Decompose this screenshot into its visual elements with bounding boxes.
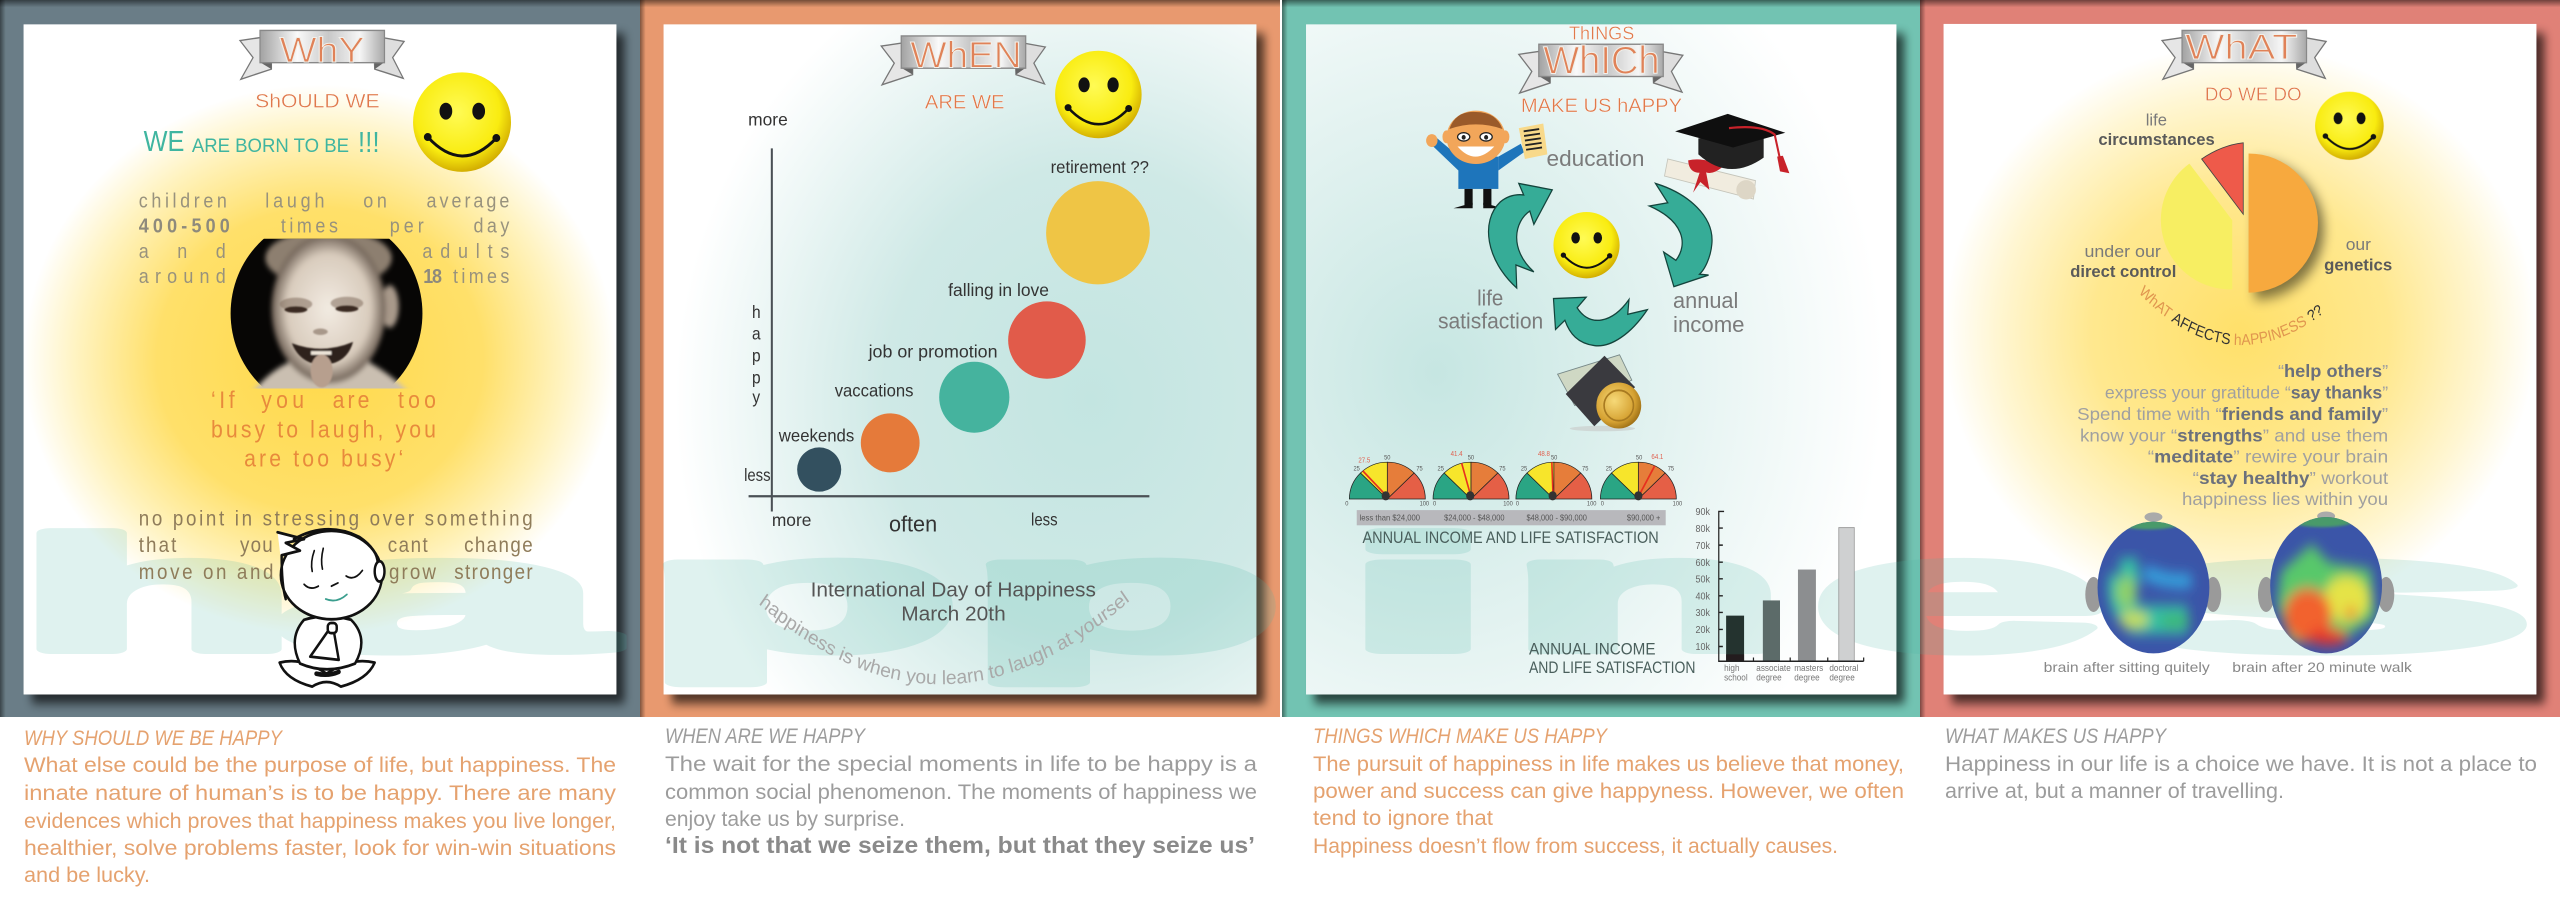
axis labels: y	[752, 387, 761, 407]
text block: no point in stressing: grow	[389, 561, 436, 584]
text block: no point in stressing: change	[464, 534, 533, 557]
gauge: 90000 plus	[1600, 454, 1683, 508]
photo: laughing child	[230, 238, 422, 388]
gauge: 90000 plus: 100	[1673, 500, 1683, 508]
footer text: why should we be happy: and be lucky.	[24, 864, 150, 887]
heading banner: why: ShOULD WE	[255, 89, 380, 112]
bubble: falling in love	[948, 280, 1086, 379]
text block: no point in stressing	[139, 507, 533, 584]
text block: laugh statistics: 18	[423, 266, 443, 288]
tagline	[144, 126, 380, 158]
pie labels: circumstances	[2098, 131, 2215, 149]
gauge: 24000 to 48000: 0	[1433, 500, 1437, 508]
text block: no point in stressing: cant	[388, 534, 428, 557]
text block: what to do: “help others ”	[2278, 361, 2388, 381]
caption: brain after walk: brain after 20 minute walk	[2232, 659, 2412, 675]
footer text: when are we happy: ‘It is not that we seize them, but that they seize us’	[665, 832, 1255, 858]
slice: life circumstances	[2202, 143, 2243, 214]
tagline: !!!	[358, 127, 380, 158]
footer text: why should we be happy: evidences which proves that happiness makes you live longer,	[24, 810, 616, 833]
icon: smiley	[413, 72, 511, 172]
axis labels: less	[744, 465, 771, 485]
gauge: 90000 plus: 50	[1636, 454, 1643, 462]
axis labels: a	[752, 324, 761, 344]
footer text: why should we be happy: healthier, solve problems faster, look for win-win situations	[24, 837, 616, 860]
text block: laugh statistics: day	[473, 216, 510, 238]
y labels: 90k	[1696, 507, 1710, 518]
text block: laugh statistics: around	[139, 266, 227, 288]
tagline: ARE BORN TO BE	[192, 134, 349, 156]
gauge: less than 24000: 0	[1345, 500, 1349, 508]
quote: too	[398, 387, 436, 413]
gauge: less than 24000: 25	[1353, 465, 1360, 473]
y labels	[1696, 507, 1710, 653]
axis labels: often	[889, 512, 937, 537]
brain scan: sitting quietly	[2085, 512, 2221, 657]
gauge: 48000 to 90000: 48.8	[1538, 451, 1550, 458]
axes	[749, 148, 1149, 511]
footer text: what makes us happy: WHAT MAKES US HAPPY	[1945, 725, 2168, 748]
bubble: weekends	[778, 426, 854, 492]
quote: are	[333, 387, 369, 413]
brain scan: after walk	[2258, 511, 2394, 654]
footer text: things which make us happy: Happiness doesn’t flow from success, it actually causes.	[1313, 835, 1838, 858]
pie labels: under our	[2084, 243, 2161, 261]
curved text: happiness quote: happiness is when you learn to laugh at yourself	[760, 208, 1150, 686]
y labels: 20k	[1696, 625, 1710, 636]
quote: busy to laugh, you	[211, 417, 436, 443]
gauge: 24000 to 48000	[1433, 451, 1513, 508]
heading banner: what: WhAT	[2185, 28, 2298, 67]
axis labels: p	[752, 368, 761, 388]
gauge: 48000 to 90000: 25	[1521, 465, 1528, 473]
bubble: job or promotion	[867, 342, 1009, 433]
text block: no point in stressing: move on and	[139, 561, 273, 584]
watermark: happiness: i	[1345, 504, 1492, 683]
text block: laugh statistics	[139, 190, 510, 288]
pie labels: genetics	[2324, 257, 2393, 275]
text block: international day of happiness	[811, 580, 1096, 626]
x labels: associate	[1756, 662, 1791, 673]
x labels	[1724, 662, 1858, 683]
cycle arrows	[1489, 183, 1712, 346]
bubble: weekends: weekends	[778, 426, 854, 446]
footer text: what makes us happy: arrive at, but a manner of travelling.	[1945, 780, 2284, 803]
label: annual income	[1673, 289, 1744, 337]
panel: when frame	[640, 0, 1280, 717]
y labels: 50k	[1696, 574, 1710, 586]
footer text: things which make us happy: tend to ignore that	[1313, 807, 1493, 830]
panel: why frame	[0, 0, 640, 717]
gauge: 24000 to 48000: 25	[1438, 465, 1444, 473]
gauge: less than 24000: 50	[1384, 454, 1391, 462]
bubble: job or promotion: job or promotion	[867, 342, 998, 362]
text block: laugh statistics: times	[453, 266, 510, 288]
icon: smiley	[2315, 92, 2384, 160]
footer text: when are we happy: The wait for the special moments in life to be happy is a	[665, 753, 1257, 776]
panel: what makes us happy	[2044, 28, 2412, 675]
pie chart: what affects happiness	[2161, 143, 2324, 300]
watermark: happiness: n	[1511, 504, 1785, 683]
y labels: 40k	[1696, 591, 1710, 603]
curved text: what affects happiness: WhAT AFFECTS hAPPINESS ??	[2140, 284, 2321, 346]
quote: are too busy‘	[244, 445, 403, 472]
text block: what to do	[2077, 361, 2389, 509]
arrow: life satisfaction to education	[1489, 183, 1552, 288]
footer text: when are we happy: enjoy take us by surprise.	[665, 808, 905, 831]
pie labels	[2070, 112, 2393, 281]
bubble: vacations	[835, 380, 920, 472]
gauge legend bar: $24,000 - $48,000	[1444, 513, 1505, 523]
heading banner: which: WhICh	[1543, 39, 1660, 82]
gauge: 48000 to 90000: 100	[1587, 500, 1597, 508]
bubble: retirement: retirement ??	[1051, 157, 1149, 177]
gauge: 90000 plus: 75	[1668, 465, 1675, 473]
watermark: happiness: e	[1814, 504, 2103, 683]
text block: laugh statistics: times	[281, 216, 339, 238]
text block: laugh statistics: 400-500	[139, 216, 231, 238]
footer text: things which make us happy	[1313, 725, 1904, 858]
illustration: graduation cap and diploma	[1664, 114, 1789, 200]
text block: no point in stressing: no point in stressing over something	[139, 507, 533, 531]
arrow: education to income	[1649, 183, 1712, 287]
footer text: things which make us happy: power and success can give happyness. However, we often	[1313, 780, 1904, 803]
footer text: what makes us happy	[1945, 725, 2537, 803]
label: annual income: annual	[1673, 289, 1738, 313]
axes	[1719, 511, 1864, 661]
illustration: wallet and coin	[1558, 355, 1641, 431]
heading banner: which: ThINGS	[1569, 23, 1634, 44]
y labels: 60k	[1696, 557, 1710, 569]
watermark: happiness: s	[2116, 504, 2534, 683]
heading banner: when	[881, 35, 1045, 113]
panel: what frame	[1920, 0, 2560, 717]
gauge: less than 24000: 27.5	[1358, 457, 1371, 465]
caption: bar chart	[1529, 641, 1696, 677]
x labels: school	[1724, 672, 1748, 683]
text block: what to do: happiness lies within you	[2182, 489, 2388, 509]
y labels: 10k	[1696, 642, 1710, 653]
bubble: falling in love: falling in love	[948, 280, 1049, 300]
illustration: happy graduate	[1426, 111, 1547, 208]
gauge: less than 24000: 100	[1420, 500, 1430, 508]
caption: bar chart: ANNUAL INCOME	[1529, 641, 1656, 659]
footer text: what makes us happy: Happiness in our life is a choice we have. It is not a place to	[1945, 753, 2537, 776]
heading banner: what: DO WE DO	[2205, 84, 2302, 105]
x labels: degree	[1756, 672, 1782, 683]
gauge: 90000 plus: 25	[1606, 465, 1613, 473]
text block: no point in stressing: that	[139, 534, 177, 557]
gauge: 90000 plus: 64.1	[1651, 454, 1664, 461]
text block: laugh statistics: laugh	[265, 190, 325, 213]
quote: ‘If	[211, 387, 235, 413]
slice: our genetics	[2249, 153, 2318, 293]
axis labels: p	[752, 346, 761, 366]
bubble: retirement	[1046, 157, 1150, 284]
heading banner: which: MAKE US hAPPY	[1521, 94, 1682, 116]
heading banner: what	[2162, 28, 2326, 105]
text block: laugh statistics: per	[390, 216, 424, 238]
axis labels	[744, 109, 1058, 537]
bubble chart: happy vs often	[744, 109, 1150, 537]
gauge: 48000 to 90000	[1516, 451, 1597, 508]
slice: under our direct control	[2161, 164, 2232, 289]
caption: brain after sitting: brain after sitting quitely	[2044, 659, 2210, 675]
y labels: 80k	[1696, 523, 1710, 535]
watermark: happiness	[19, 504, 2534, 684]
pie labels: our	[2346, 236, 2371, 254]
axis labels: more	[772, 510, 811, 530]
text block: laugh statistics: children	[139, 190, 228, 213]
label: education: education	[1547, 147, 1644, 171]
panel: things frame	[1282, 0, 1920, 717]
text block: no point in stressing: stronger	[454, 561, 533, 584]
x labels: degree	[1829, 672, 1855, 683]
footer text: when are we happy: WHEN ARE WE HAPPY	[665, 725, 867, 748]
quote	[211, 387, 436, 472]
illustration: meditating boy	[278, 529, 384, 687]
footer text: things which make us happy: The pursuit of happiness in life makes us believe that money,	[1313, 753, 1904, 776]
text block: laugh statistics: on	[363, 190, 388, 213]
heading banner: when: WhEN	[910, 35, 1022, 76]
pie labels: direct control	[2070, 263, 2176, 281]
gauge: less than 24000: 75	[1416, 465, 1423, 473]
gauge: 48000 to 90000: 75	[1582, 465, 1589, 473]
panel: when are we happy	[744, 35, 1150, 686]
text block: what to do: “meditate ” rewire your brain	[2148, 447, 2388, 467]
gauge: 24000 to 48000: 50	[1468, 454, 1475, 462]
text block: laugh statistics: adults	[422, 241, 510, 263]
text block: what to do: express your gratitude “ say thanks ”	[2105, 383, 2388, 403]
heading banner: when: ARE WE	[925, 90, 1004, 113]
text block: what to do: Spend time with “ friends and family ”	[2077, 404, 2388, 424]
footer text: when are we happy: common social phenomenon. The moments of happiness we	[665, 781, 1257, 804]
text block: international day of happiness: March 20th	[901, 604, 1006, 626]
y labels: 70k	[1696, 540, 1710, 552]
footer text: why should we be happy: What else could be the purpose of life, but happiness. The	[24, 754, 616, 777]
heading banner: why: WhY	[280, 32, 364, 71]
gauge legend bar: less than $24,000	[1360, 513, 1421, 523]
heading banner: why	[240, 30, 404, 112]
bar chart: income by degree	[1696, 507, 1864, 683]
gauge legend bar	[1357, 510, 1666, 525]
heading banner: which	[1519, 23, 1683, 116]
x labels: high	[1724, 662, 1740, 673]
gauge: 24000 to 48000: 100	[1503, 500, 1513, 508]
panel: things which make us happy	[1345, 23, 1864, 683]
arrow: income to life satisfaction	[1553, 297, 1647, 346]
gauge: less than 24000	[1345, 454, 1430, 508]
text block: what to do: know your “ strengths ” and use them	[2080, 426, 2388, 446]
axis labels: less	[1031, 509, 1058, 530]
quote: you	[261, 387, 304, 413]
bars	[1726, 528, 1854, 661]
axis labels: h	[752, 302, 761, 322]
label: life satisfaction: life	[1477, 286, 1503, 311]
tagline: WE	[144, 126, 184, 157]
x labels: masters	[1794, 662, 1824, 673]
label: annual income: income	[1673, 313, 1744, 337]
watermark: happiness: h	[19, 504, 296, 683]
text block: what to do: “stay healthy ” workout	[2193, 468, 2389, 488]
gauge: 24000 to 48000: 75	[1499, 465, 1506, 473]
footer text: why should we be happy: innate nature of human’s is to be happy. There are many	[24, 782, 617, 805]
watermark: happiness: p	[645, 505, 958, 684]
footer text: why should we be happy	[24, 727, 617, 887]
caption: bar chart: AND LIFE SATISFACTION	[1529, 659, 1696, 677]
y labels: 30k	[1696, 608, 1710, 619]
gauge legend bar: $48,000 - $90,000	[1527, 513, 1588, 523]
gauge: 90000 plus: 0	[1601, 500, 1605, 508]
bubble: vacations: vaccations	[835, 380, 913, 401]
footer text: why should we be happy: WHY SHOULD WE BE HAPPY	[24, 727, 284, 750]
footer text: things which make us happy: THINGS WHICH MAKE US HAPPY	[1313, 725, 1609, 748]
gauge: 48000 to 90000: 50	[1551, 454, 1558, 462]
gauge: 24000 to 48000: 41.4	[1451, 451, 1463, 458]
panel: why should we be happy	[139, 30, 533, 687]
text block: no point in stressing: you	[240, 534, 273, 557]
icon: smiley	[1055, 51, 1142, 138]
watermark: happiness: p	[968, 505, 1281, 684]
label: life satisfaction	[1438, 286, 1543, 334]
caption: gauges: ANNUAL INCOME AND LIFE SATISFACTION	[1362, 529, 1659, 547]
x labels: degree	[1794, 672, 1820, 683]
pie labels: life	[2146, 112, 2167, 130]
gauge: 48000 to 90000: 0	[1516, 500, 1520, 508]
icon: smiley	[1553, 212, 1620, 278]
axis labels: more	[748, 109, 788, 130]
text block: laugh statistics: average	[427, 190, 510, 213]
watermark: happiness: a	[277, 504, 608, 683]
text block: laugh statistics: and	[139, 241, 227, 263]
footer text: when are we happy	[665, 725, 1257, 858]
label: life satisfaction: satisfaction	[1438, 309, 1543, 334]
x labels: doctoral	[1829, 662, 1858, 673]
text block: international day of happiness: International Day of Happiness	[811, 580, 1096, 602]
gauge legend bar: $90,000 +	[1627, 513, 1661, 523]
